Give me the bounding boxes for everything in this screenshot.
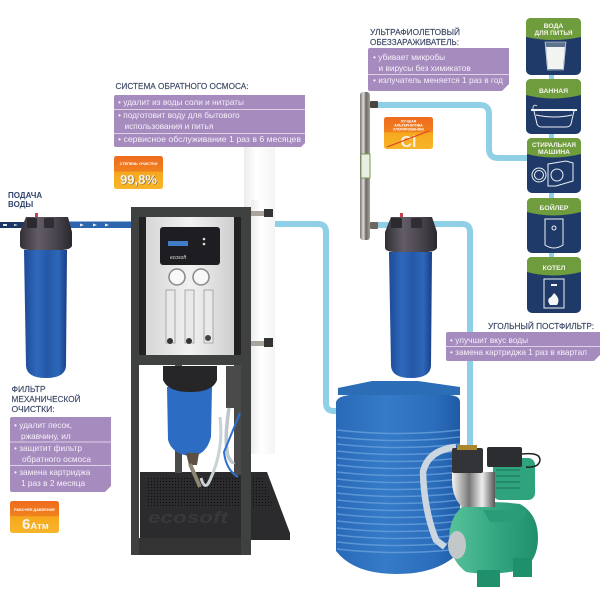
control panel	[146, 217, 234, 355]
heading: mechanical filter: МЕХАНИЧЕСКОЙ	[12, 393, 80, 404]
icon: bathtub	[531, 105, 577, 127]
icon: gas boiler with flame	[544, 279, 564, 308]
panel: mechanical filter features: • защитит фильтр	[14, 443, 82, 453]
panel: reverse osmosis features: • удалит из воды соли и нитраты	[118, 97, 244, 107]
pipe: UV sterilizer to carbon filter	[376, 222, 396, 228]
panel: mechanical filter features: • удалит песок,	[14, 420, 72, 430]
heading: water inlet	[8, 191, 42, 209]
heading: reverse osmosis system: СИСТЕМА ОБРАТНОГО ОСМОСА:	[116, 81, 248, 91]
panel: UV sterilizer features: и вирусы без химикатов	[378, 63, 471, 73]
panel: reverse osmosis features: • подготовит воду для бытового	[118, 110, 240, 120]
pipe: mechanical filter to reverse osmosis system	[66, 222, 134, 228]
heading: carbon postfilter: УГОЛЬНЫЙ ПОСТФИЛЬТР:	[488, 320, 594, 331]
badge: chlorine alternative: ХЛОРИРОВАНИЮ	[393, 128, 424, 132]
panel: mechanical filter features: 1 раз в 2 месяца	[21, 478, 86, 488]
card: drinking water: ДЛЯ ПИТЬЯ	[534, 30, 573, 37]
heading: water inlet: ПОДАЧА	[8, 191, 42, 200]
frame	[131, 207, 251, 555]
base tray	[140, 472, 290, 540]
card: boiler: БОЙЛЕР	[540, 203, 569, 212]
badge: chlorine alternative	[384, 117, 433, 151]
membrane tube of the osmosis system	[244, 147, 275, 454]
panel: mechanical filter features: • замена картриджа	[14, 467, 91, 477]
hoses	[201, 408, 240, 486]
heading: UV sterilizer: ОБЕЗЗАРАЖИВАТЕЛЬ:	[370, 37, 459, 47]
consumers connector pipe	[549, 72, 554, 262]
heading: water inlet: ВОДЫ	[8, 200, 33, 209]
icon: washing machine	[532, 161, 573, 186]
badge: chlorine alternative: Cl	[400, 134, 416, 151]
pipe: UV sterilizer to consumers	[376, 105, 528, 158]
carbon postfilter	[385, 213, 437, 378]
panel: mechanical filter features	[10, 417, 111, 492]
panel: reverse osmosis features: • сервисное обслуживание 1 раз в 6 месяцев	[118, 134, 302, 144]
badge: working pressure: РАБОЧЕЕ ДАВЛЕНИЕ	[14, 508, 55, 512]
heading: mechanical filter: ФИЛЬТР	[12, 384, 46, 394]
UV sterilizer	[360, 92, 378, 240]
badge: purification rate: 99,8%	[121, 173, 158, 188]
icon: glass of water	[545, 42, 566, 70]
control panel: ecosoft	[170, 255, 187, 261]
card: bathroom	[526, 79, 581, 134]
reverse osmosis unit	[131, 207, 290, 555]
card: bathroom: ВАННАЯ	[539, 88, 568, 95]
badge: working pressure	[10, 501, 59, 533]
panel: UV sterilizer features: • убивает микробы	[373, 52, 445, 62]
base tray: ecosoft	[148, 508, 230, 527]
pipe: carbon postfilter down to pump	[432, 224, 470, 446]
badge: chlorine alternative: ЛУЧШАЯ	[401, 120, 417, 124]
panel: mechanical filter features: ржавчину, ил	[21, 431, 71, 441]
badge: purification rate: 99,8%	[120, 172, 157, 187]
icon: water heater	[545, 219, 563, 248]
panel: mechanical filter features: обратного осмоса	[22, 454, 91, 464]
panel: carbon postfilter features: • улучшит вкус воды	[450, 335, 528, 345]
panel: reverse osmosis features	[114, 95, 305, 147]
badge: purification rate: СТЕПЕНЬ ОЧИСТКИ	[120, 162, 158, 166]
panel: carbon postfilter features	[446, 332, 600, 361]
card: drinking water: ВОДА	[544, 23, 563, 30]
badge: chlorine alternative: АЛЬТЕРНАТИВА	[394, 124, 423, 128]
panel: UV sterilizer features	[368, 48, 509, 91]
panel: carbon postfilter features: • замена картриджа 1 раз в квартал	[450, 347, 587, 357]
card: heating boiler	[527, 257, 581, 313]
heading: UV sterilizer	[370, 26, 460, 47]
badge: working pressure: 6Атм	[22, 516, 49, 533]
card: washing machine	[527, 138, 581, 193]
pump body	[493, 458, 535, 500]
card: boiler	[527, 198, 581, 253]
storage tank	[336, 381, 460, 574]
pump unit	[423, 445, 540, 587]
heading: mechanical filter	[12, 384, 80, 414]
mechanical filter	[20, 213, 72, 378]
prefilter inside the frame	[163, 366, 234, 487]
heading: mechanical filter: ОЧИСТКИ:	[12, 404, 55, 414]
pipe: osmosis system to storage tank	[275, 224, 342, 411]
card: washing machine: МАШИНА	[538, 149, 570, 156]
panel: UV sterilizer features: • излучатель меняется 1 раз в год	[373, 75, 503, 85]
hose	[423, 447, 456, 547]
heading: UV sterilizer: УЛЬТРАФИОЛЕТОВЫЙ	[370, 26, 460, 37]
inlet pipe: dark section with flow arrows	[0, 222, 25, 228]
pressure tank	[449, 502, 538, 574]
panel: reverse osmosis features: использования и питья	[124, 121, 213, 131]
card: drinking water	[526, 18, 581, 75]
card: washing machine: СТИРАЛЬНАЯ	[532, 142, 576, 149]
badge: purification rate	[114, 156, 163, 189]
card: heating boiler: КОТЕЛ	[543, 265, 566, 272]
